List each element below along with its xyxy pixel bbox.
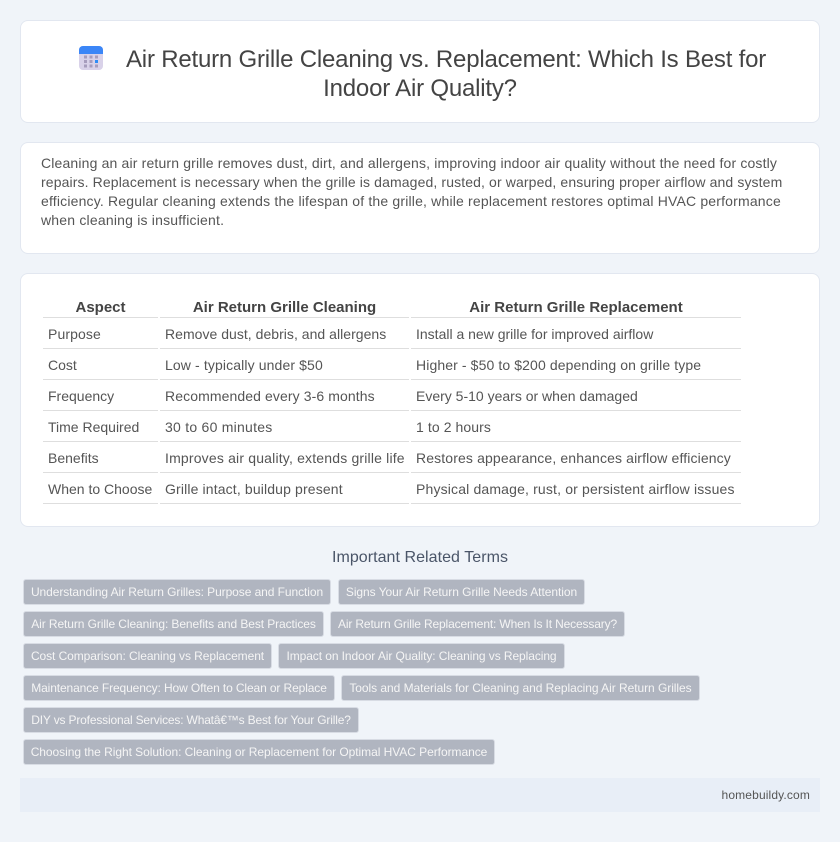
comparison table: Low - typically under $50	[165, 357, 323, 373]
title: Indoor Air Quality?	[323, 75, 517, 102]
tag	[338, 579, 585, 605]
tag list	[23, 579, 700, 765]
tag: Understanding Air Return Grilles: Purpose and Function	[31, 585, 323, 599]
heading: related terms: Important Related Terms	[332, 549, 508, 566]
panel: introduction	[20, 142, 820, 254]
tag	[23, 579, 331, 605]
intro text: Cleaning an air return grille removes dust, dirt, and allergens, improving indoor air quality without the need for costly	[41, 155, 777, 171]
comparison table: 30 to 60 minutes	[165, 419, 273, 435]
table header: Air Return Grille Cleaning	[193, 299, 376, 316]
tag	[341, 675, 700, 701]
table header: Aspect	[75, 299, 126, 316]
comparison table: Grille intact, buildup present	[165, 481, 343, 497]
tag	[23, 707, 359, 733]
tag	[278, 643, 565, 669]
comparison table: Higher - $50 to $200 depending on grille type	[416, 357, 701, 373]
comparison table: Physical damage, rust, or persistent airflow issues	[416, 481, 735, 497]
intro text: repairs. Replacement is necessary when the grille is damaged, rusted, or warped, ensuring proper airflow and system	[41, 174, 782, 190]
table header	[75, 299, 683, 316]
footer	[20, 778, 820, 812]
panel: header	[20, 20, 820, 123]
tag: Signs Your Air Return Grille Needs Attention	[346, 585, 577, 599]
table header: Air Return Grille Replacement	[469, 299, 683, 316]
comparison table: Improves air quality, extends grille life	[165, 450, 405, 466]
tag	[23, 739, 495, 765]
panel: comparison table	[20, 273, 820, 527]
comparison table: Frequency	[48, 388, 114, 404]
comparison table: Restores appearance, enhances airflow efficiency	[416, 450, 731, 466]
comparison table: Benefits	[48, 450, 99, 466]
tag: Air Return Grille Replacement: When Is It Necessary?	[338, 617, 617, 631]
comparison table: Remove dust, debris, and allergens	[165, 326, 386, 342]
intro text: when cleaning is insufficient.	[41, 212, 224, 228]
tag: Air Return Grille Cleaning: Benefits and Best Practices	[31, 617, 316, 631]
icon: calendar	[79, 46, 103, 70]
comparison table: When to Choose	[48, 481, 152, 497]
title: Air Return Grille Cleaning vs. Replacement: Which Is Best for	[126, 46, 766, 73]
tag: Impact on Indoor Air Quality: Cleaning vs Replacing	[286, 649, 557, 663]
intro text: efficiency. Regular cleaning extends the lifespan of the grille, while replacement restores optimal HVAC performance	[41, 193, 781, 209]
tag	[23, 643, 272, 669]
tag	[23, 611, 324, 637]
comparison table: Cost	[48, 357, 77, 373]
tag	[330, 611, 625, 637]
title	[126, 46, 766, 102]
comparison table: Time Required	[48, 419, 139, 435]
tag	[23, 675, 335, 701]
footer source: homebuildy.com	[722, 788, 810, 802]
comparison table: Recommended every 3-6 months	[165, 388, 375, 404]
comparison table: Install a new grille for improved airflow	[416, 326, 653, 342]
comparison table	[43, 299, 741, 504]
intro text	[41, 155, 782, 228]
tag: Maintenance Frequency: How Often to Clean or Replace	[31, 681, 327, 695]
comparison table: Every 5-10 years or when damaged	[416, 388, 638, 404]
comparison table: Purpose	[48, 326, 101, 342]
tag: Tools and Materials for Cleaning and Replacing Air Return Grilles	[349, 681, 692, 695]
comparison table: 1 to 2 hours	[416, 419, 491, 435]
tag: Cost Comparison: Cleaning vs Replacement	[31, 649, 264, 663]
tag: Choosing the Right Solution: Cleaning or Replacement for Optimal HVAC Performance	[31, 745, 487, 759]
tag: DIY vs Professional Services: Whatâ€™s Best for Your Grille?	[31, 713, 351, 727]
